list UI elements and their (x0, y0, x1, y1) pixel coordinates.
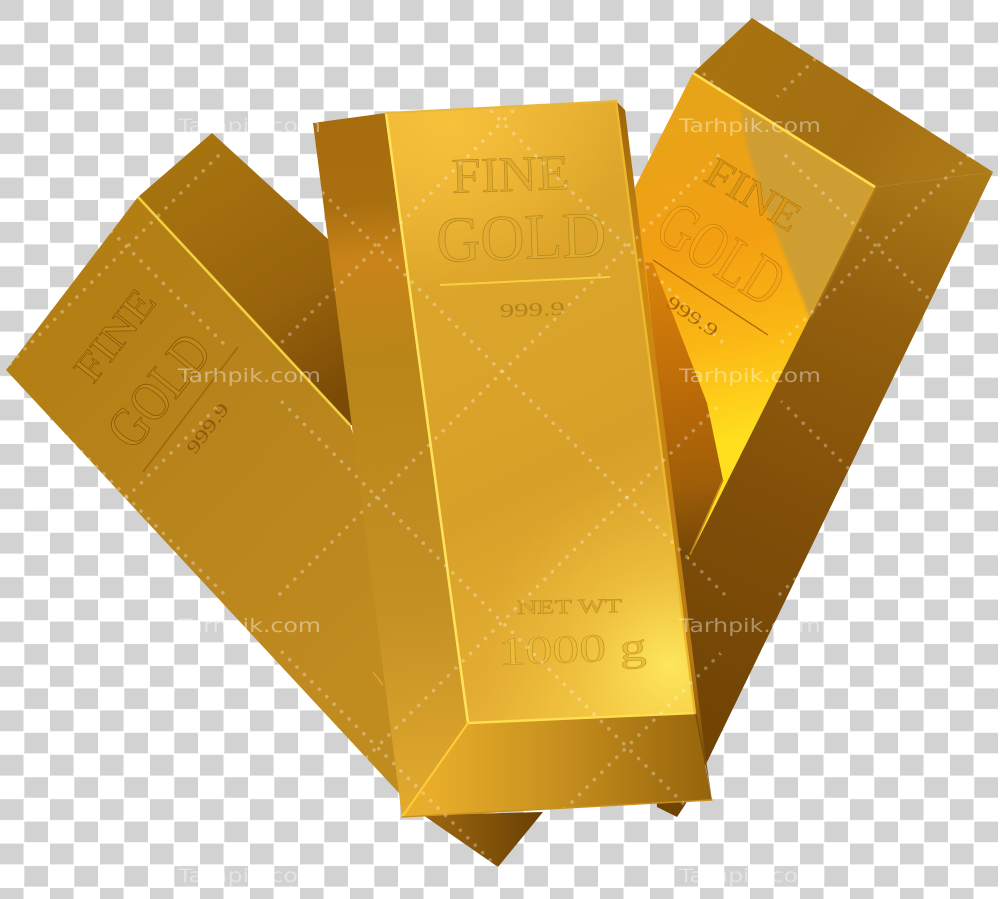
watermark text: Tarhpik.com (678, 615, 821, 637)
center bar text: 999.9: 999.9 (499, 299, 565, 322)
center bar text: FINE: FINE (450, 144, 570, 204)
gold bar: center (313, 101, 712, 817)
gold bar: right (635, 18, 993, 817)
left bar edge highlight (138, 197, 350, 425)
center bar bottom face (402, 713, 712, 817)
left bar top face (138, 133, 368, 425)
center bar text: GOLD: GOLD (435, 199, 607, 277)
right bar top face (693, 18, 993, 187)
small mark on left bar (373, 672, 383, 685)
gold bar: left (6, 133, 543, 867)
watermark text: Tarhpik.com (177, 115, 321, 137)
center bar left face (313, 113, 468, 817)
center bar right sliver (616, 101, 712, 800)
center bar front face (386, 101, 695, 723)
watermark text: Tarhpik.com (678, 115, 821, 137)
right bar side face (640, 172, 993, 817)
left bar text: 999.9: 999.9 (182, 399, 233, 457)
center bar text: NET WT: NET WT (517, 595, 622, 619)
right bar text: GOLD: GOLD (644, 185, 799, 321)
left bar bottom tip (423, 812, 543, 867)
right bar text: 999.9: 999.9 (663, 292, 722, 341)
center bar upper glow (386, 101, 695, 723)
watermark text: Tarhpik.com (177, 865, 321, 887)
watermark text: Tarhpik.com (177, 615, 321, 637)
left bar text: FINE: FINE (65, 280, 165, 391)
right bar pale reflection (740, 105, 875, 318)
right bar wedge highlight (690, 480, 723, 555)
right bar text: FINE: FINE (697, 149, 809, 242)
right bar edge highlight (693, 73, 875, 187)
left bar text: GOLD: GOLD (95, 322, 224, 460)
right bar engraved line (653, 260, 768, 335)
right bar front face (635, 73, 875, 560)
center bar edge highlights (386, 101, 712, 817)
watermark text (177, 115, 821, 887)
watermark text: Tarhpik.com (177, 365, 321, 387)
center bar lower glow (386, 101, 695, 723)
left bar front face (6, 197, 440, 815)
left bar engraved line (143, 347, 238, 472)
right bar dark wedge (645, 262, 723, 560)
watermark text: Tarhpik.com (678, 365, 821, 387)
center bar text: 1000 g: 1000 g (498, 624, 647, 674)
watermark text: Tarhpik.com (678, 865, 821, 887)
center bar engraved line (440, 277, 610, 285)
